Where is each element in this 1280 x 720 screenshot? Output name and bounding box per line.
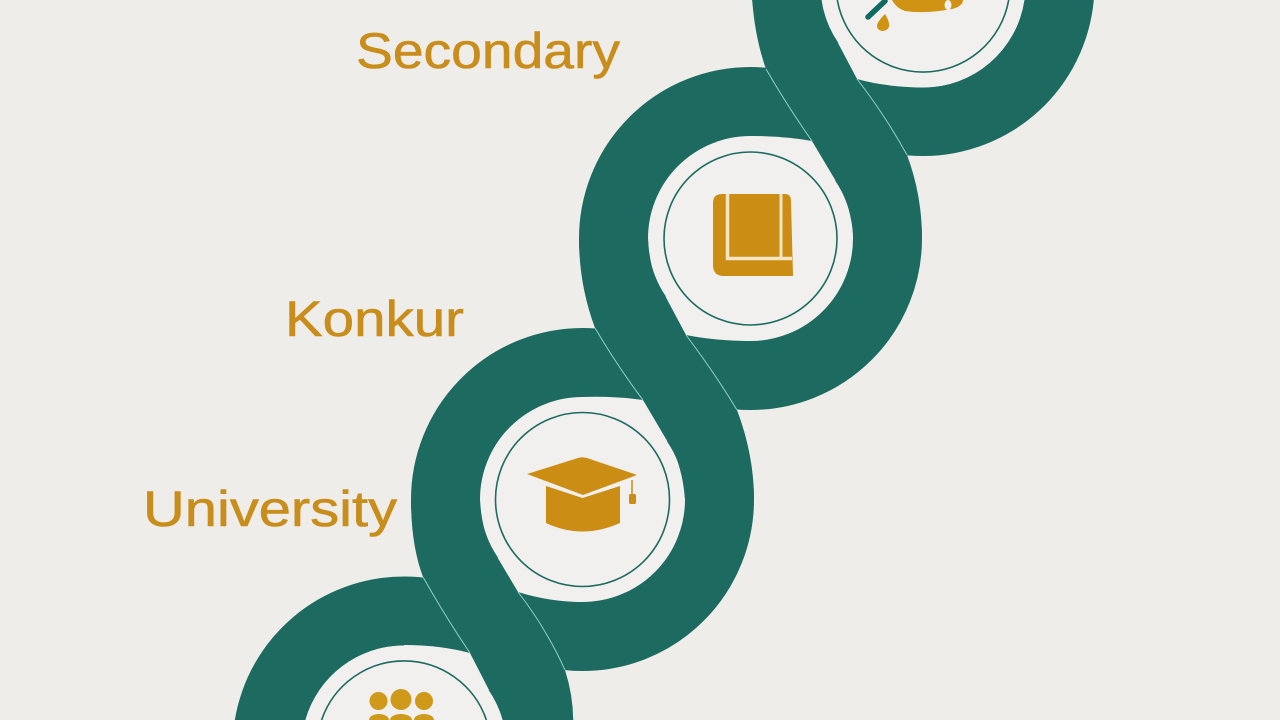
icon: group of people [369, 689, 434, 720]
ring: people stage [235, 576, 573, 720]
ring: book stage [614, 102, 888, 376]
thin inner circle: graduation cap stage [496, 412, 670, 586]
icon: graduation cap [527, 457, 637, 532]
label: Secondary: Secondary [356, 23, 620, 79]
ring: graduation cap stage [446, 362, 720, 636]
label: University: University [143, 481, 397, 537]
icon: book [713, 194, 793, 276]
label: Konkur: Konkur [285, 291, 464, 347]
connector: top to book [752, 0, 922, 238]
inner disc: people stage [305, 646, 503, 720]
ring: top stage [752, 0, 1094, 156]
connector: graduation cap to people [411, 500, 573, 720]
thin inner circle: people stage [322, 661, 486, 720]
thin inner circle: book stage [664, 152, 837, 325]
inner disc: top stage [822, 0, 1024, 88]
flared white inner edges beside the crossings [404, 43, 923, 690]
connector: book to graduation cap [579, 238, 754, 500]
icon: cap and brush, cropped at top [868, 0, 963, 31]
thin inner circle: top stage [837, 0, 1009, 72]
